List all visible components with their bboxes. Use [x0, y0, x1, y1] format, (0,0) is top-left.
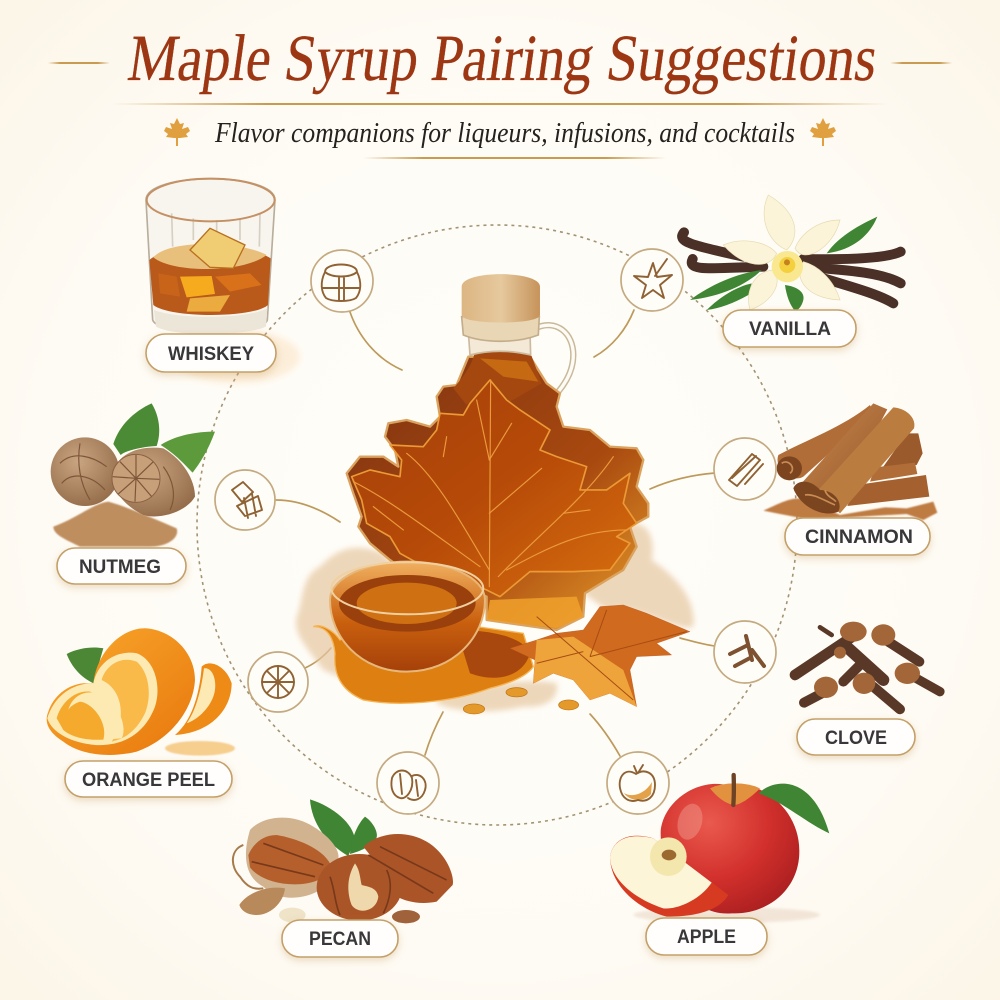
- bowl rim highlight: [331, 562, 483, 614]
- label: pecan: PECAN: [309, 929, 371, 950]
- label: apple: APPLE: [677, 927, 736, 948]
- main peel: [47, 628, 195, 755]
- icon: nutmeg and grater: [215, 470, 275, 530]
- label: cinnamon: CINNAMON: [805, 527, 913, 548]
- handle: [535, 325, 573, 392]
- lower highlight on fallen leaf: [533, 637, 637, 707]
- center kernel: [317, 854, 402, 921]
- icon: pecan: [377, 752, 439, 814]
- item: whiskey: [146, 179, 373, 383]
- subtitle: Flavor companions for liqueurs, infusions, and cocktails: [214, 117, 795, 149]
- pith ring: [47, 653, 158, 745]
- orange crumbs: [165, 741, 235, 756]
- nutmeg powder: [53, 502, 177, 547]
- label: cinnamon: [785, 518, 930, 555]
- petals: [723, 195, 840, 310]
- pods: [682, 232, 901, 303]
- inner curl: [57, 692, 121, 740]
- highlight: [674, 801, 706, 842]
- curl lines: [782, 462, 836, 505]
- apple art: [610, 775, 829, 923]
- label: whiskey: [146, 334, 276, 372]
- rim: [147, 179, 275, 221]
- dark pool under bowl: [457, 630, 530, 678]
- leaves: [310, 799, 377, 856]
- label: vanilla: VANILLA: [749, 319, 831, 340]
- orange leaf: [67, 648, 103, 683]
- leaves: [690, 217, 877, 311]
- label: clove: CLOVE: [825, 728, 887, 749]
- label: clove: [797, 719, 915, 755]
- title side rule left: [48, 62, 110, 64]
- icon: orange slice: [248, 652, 308, 712]
- seed: [662, 850, 676, 860]
- item: apple: [607, 752, 829, 955]
- fallen leaf veins: [537, 610, 687, 700]
- glass body: [146, 179, 275, 332]
- wood cap: [462, 274, 540, 322]
- label: nutmeg: NUTMEG: [79, 557, 161, 578]
- fallen maple leaf: [510, 605, 690, 707]
- right nutmeg: [113, 448, 195, 516]
- collar: [462, 317, 539, 341]
- item: cinnamon and clove art: [763, 403, 940, 709]
- whiskey liquid: [149, 246, 271, 315]
- kernel cream center: [348, 863, 378, 911]
- nutmeg face: [112, 454, 160, 502]
- inner curl pith: [68, 692, 124, 740]
- neck glass: [468, 332, 531, 355]
- front stick ends: [793, 482, 840, 514]
- lit liquid top: [153, 244, 267, 269]
- cinnamon powder: [763, 498, 937, 520]
- amber inner leaf: [352, 380, 637, 597]
- back stick: [778, 405, 873, 478]
- subtitle underline: [363, 157, 666, 159]
- leaves: [113, 403, 159, 455]
- right peel pith: [187, 668, 215, 723]
- stem: [727, 775, 740, 805]
- neck syrup: [453, 352, 542, 405]
- label: pecan: [282, 920, 398, 957]
- nutmeg texture: [60, 443, 173, 510]
- title block: [48, 22, 952, 159]
- vanilla pods and flower: [682, 195, 901, 311]
- inner hollow: [102, 660, 149, 742]
- label: vanilla: [723, 310, 856, 347]
- item: nutmeg and orange art: [47, 403, 235, 756]
- front stick: [818, 407, 914, 513]
- neck highlight: [480, 358, 538, 382]
- label glow: [173, 330, 300, 383]
- left kernel: [248, 835, 330, 884]
- item: pecan: [233, 752, 453, 957]
- right peel: [175, 663, 232, 735]
- leaf veins: [353, 380, 627, 587]
- flower center: [772, 251, 803, 282]
- label: whiskey: WHISKEY: [168, 344, 254, 365]
- hull: [246, 818, 339, 898]
- center: syrup bottle: [296, 274, 694, 714]
- lower sticks: [847, 433, 929, 506]
- slice skin: [610, 836, 728, 917]
- bottle glass and leaf, traced: [296, 274, 694, 714]
- syrup puddle: [313, 620, 533, 703]
- hull curl: [233, 845, 263, 889]
- shadow: [633, 907, 820, 923]
- label: orange peel: ORANGE PEEL: [82, 770, 215, 791]
- glass leaf body: [347, 357, 648, 630]
- slice core: [650, 837, 687, 876]
- title underline: [112, 103, 888, 105]
- right kernel: [363, 834, 453, 903]
- brown chip: [392, 910, 420, 923]
- stain wash behind puddle: [296, 524, 694, 711]
- glass base: [154, 308, 267, 334]
- middle stick: [800, 403, 887, 502]
- icon: barrel: [311, 250, 373, 312]
- slice face: [610, 836, 712, 908]
- back stick end: [777, 456, 802, 480]
- bottle foot glow: [487, 597, 583, 628]
- dotted ring: [197, 225, 797, 825]
- connectors: [276, 310, 715, 756]
- ice cubes: [190, 228, 245, 268]
- icon: cinnamon: [714, 438, 776, 500]
- item: vanilla: [621, 195, 901, 347]
- left nutmeg: [51, 437, 119, 506]
- leaf: [758, 784, 829, 833]
- shell fragment: [239, 888, 285, 915]
- cream chip: [279, 908, 306, 922]
- bowl upper: [339, 575, 476, 632]
- bowl syrup surface: [357, 583, 457, 624]
- glass bowl: [330, 562, 485, 672]
- apple body: [661, 784, 799, 914]
- glass ridges: [172, 213, 260, 247]
- label: orange peel: [65, 761, 232, 797]
- title: Maple Syrup Pairing Suggestions: [124, 22, 882, 95]
- cloves: [795, 627, 940, 709]
- icon: vanilla flower: [621, 249, 683, 311]
- clove heads: [814, 622, 920, 698]
- title side rule right: [890, 62, 952, 64]
- icon: apple: [607, 752, 669, 814]
- icon: clove: [714, 621, 776, 683]
- icon: small maple leaf left: [164, 118, 190, 146]
- kernel grooves: [252, 843, 447, 915]
- icon: small maple leaf right: [810, 118, 836, 146]
- apple dimple: [710, 783, 760, 805]
- syrup droplets: [463, 688, 579, 714]
- whiskey glass: [146, 179, 300, 383]
- pecans art: [233, 799, 453, 923]
- label: apple: [646, 918, 767, 955]
- label: nutmeg: [57, 548, 186, 584]
